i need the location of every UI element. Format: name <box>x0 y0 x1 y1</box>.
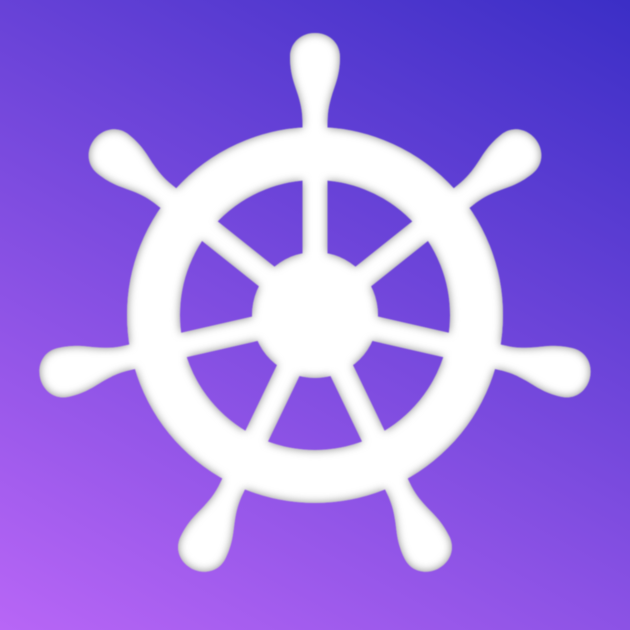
ship wheel <box>35 33 595 580</box>
handles <box>35 33 595 580</box>
rim <box>154 154 476 476</box>
spokes <box>122 120 508 496</box>
hub <box>252 252 378 378</box>
